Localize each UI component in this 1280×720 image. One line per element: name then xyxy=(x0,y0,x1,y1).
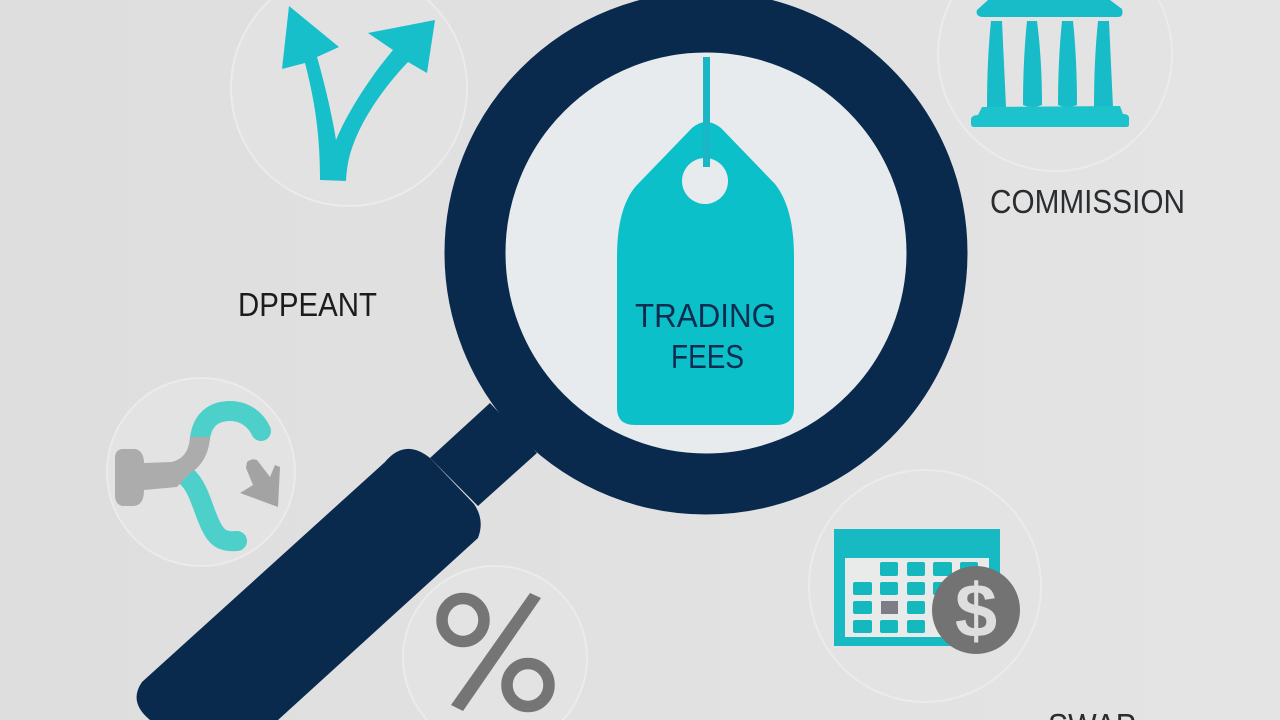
icon: split path with arrow in circle xyxy=(107,378,295,566)
icon: calendar with dollar coin in circle xyxy=(809,470,1041,702)
label: commission: COMMISSION xyxy=(990,183,1185,220)
dollar coin xyxy=(932,566,1020,654)
dollar coin: $ xyxy=(955,569,997,654)
icon: percent sign in circle xyxy=(403,566,587,720)
tag body xyxy=(617,122,794,425)
tag string xyxy=(703,57,710,167)
handle neck xyxy=(430,403,537,506)
calendar xyxy=(834,529,1000,646)
icon: bank building in circle xyxy=(938,0,1172,171)
handle grip xyxy=(137,449,481,720)
tag text: TRADING xyxy=(635,297,776,334)
label: dppeant: DPPEANT xyxy=(238,286,377,323)
tag text: FEES xyxy=(671,338,744,375)
price tag xyxy=(617,57,794,425)
lens ring xyxy=(475,22,937,484)
magnifying glass xyxy=(137,22,937,720)
icon: diverging arrows in circle xyxy=(231,0,467,206)
tag text xyxy=(635,297,776,375)
